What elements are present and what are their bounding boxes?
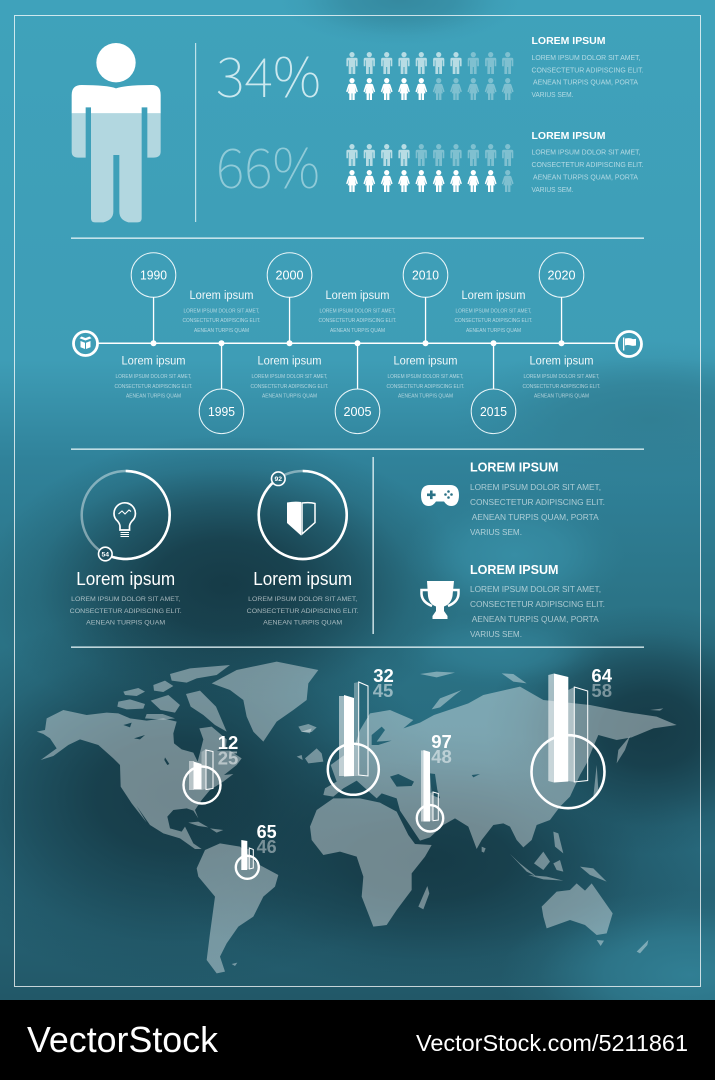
bar marker: East Asia 64 / 58: 58	[591, 680, 612, 701]
ring caption 2: AENEAN TURPIS QUAM	[263, 619, 343, 626]
ring caption 1: AENEAN TURPIS QUAM	[86, 619, 166, 626]
ring caption 2	[247, 569, 359, 626]
text block: second stat description: LOREM IPSUM	[532, 130, 606, 142]
text block: first stat description: LOREM IPSUM DOLOR SIT AMET,	[532, 53, 640, 62]
world map	[37, 662, 677, 973]
watermark url: VectorStock.com/5211861	[416, 1030, 688, 1056]
text block: gamepad note: VARIUS SEM.	[470, 527, 522, 537]
milestone 2015	[471, 340, 516, 434]
timeline text 5: LOREM IPSUM DOLOR SIT AMET,	[388, 374, 464, 380]
timeline text 3: AENEAN TURPIS QUAM	[262, 394, 317, 400]
timeline text 1: AENEAN TURPIS QUAM	[126, 394, 181, 400]
timeline text 2: Lorem ipsum	[190, 290, 254, 302]
milestone 1990: 1990	[140, 268, 167, 282]
pictogram row: men 4 of 10	[346, 144, 513, 166]
icon: trophy	[422, 581, 458, 619]
text block: trophy note: VARIUS SEM.	[470, 629, 522, 639]
footer bar	[0, 1000, 715, 1080]
watermark logo: VectorStock	[27, 1019, 219, 1060]
stat: 66%: 66%	[216, 124, 320, 204]
text block: gamepad note: AENEAN TURPIS QUAM, PORTA	[472, 512, 599, 522]
ring caption 2: Lorem ipsum	[253, 569, 352, 589]
ring chart: 54 with bulb	[82, 471, 170, 561]
bar marker: Middle East 97 / 48: 97	[431, 731, 452, 752]
text block: trophy note: LOREM IPSUM	[470, 563, 558, 577]
text block: gamepad note	[470, 461, 605, 537]
timeline text 2	[182, 290, 260, 334]
ring caption 2: CONSECTETUR ADIPISCING ELIT.	[247, 608, 359, 615]
timeline text 4: CONSECTETUR ADIPISCING ELIT.	[318, 318, 396, 324]
timeline text 4	[318, 290, 396, 334]
stat: 34%: 34%	[216, 33, 321, 113]
ring caption 2: LOREM IPSUM DOLOR SIT AMET,	[248, 596, 357, 603]
pictogram row: women 9 of 10	[346, 170, 514, 192]
bar marker: North America 12 / 25: 25	[218, 748, 238, 768]
text block: trophy note: AENEAN TURPIS QUAM, PORTA	[472, 614, 599, 624]
text block: second stat description: CONSECTETUR ADIPISCING ELIT.	[532, 160, 644, 169]
milestone 2010	[403, 253, 448, 346]
timeline text 1: CONSECTETUR ADIPISCING ELIT.	[114, 384, 192, 390]
timeline text 6: CONSECTETUR ADIPISCING ELIT.	[454, 318, 532, 324]
timeline text 4: Lorem ipsum	[326, 290, 390, 302]
timeline text 6	[454, 290, 532, 334]
bar marker: South America 65 / 46	[236, 822, 277, 879]
icon: open box start marker	[74, 332, 98, 356]
bar marker: South America 65 / 46: 46	[257, 837, 277, 857]
milestone 2020	[539, 253, 584, 346]
timeline text 2: LOREM IPSUM DOLOR SIT AMET,	[184, 308, 260, 314]
text block: second stat description: AENEAN TURPIS QUAM, PORTA	[533, 172, 638, 181]
panel: progress rings	[70, 471, 359, 626]
bar marker: North America 12 / 25	[184, 732, 238, 804]
text block: first stat description: VARIUS SEM.	[532, 90, 574, 99]
text block: gamepad note: LOREM IPSUM	[470, 461, 558, 475]
bar marker: Europe 32 / 45: 45	[373, 680, 393, 701]
timeline text 7	[522, 356, 600, 400]
map: eurasia, africa and oceania	[297, 672, 677, 953]
panel: game and trophy notes	[421, 461, 605, 639]
panel: gender statistics	[72, 33, 644, 222]
bar marker: North America 12 / 25: 12	[218, 732, 238, 753]
pictogram row: women 5 of 10	[346, 78, 514, 100]
icon: light bulb	[114, 503, 135, 536]
bar marker: Europe 32 / 45: 32	[373, 665, 394, 686]
bar marker: East Asia 64 / 58	[532, 665, 613, 808]
timeline text 7: CONSECTETUR ADIPISCING ELIT.	[522, 384, 600, 390]
text block: second stat description: LOREM IPSUM DOLOR SIT AMET,	[532, 148, 640, 157]
milestone 1995: 1995	[208, 405, 235, 419]
text block: first stat description: CONSECTETUR ADIPISCING ELIT.	[532, 65, 644, 74]
timeline text 2: CONSECTETUR ADIPISCING ELIT.	[182, 318, 260, 324]
timeline text 1: Lorem ipsum	[122, 356, 186, 368]
icon: shield	[287, 502, 315, 536]
milestone 2000	[267, 253, 312, 346]
text block: gamepad note: LOREM IPSUM DOLOR SIT AMET,	[470, 482, 601, 492]
text block: trophy note: CONSECTETUR ADIPISCING ELIT.	[470, 599, 605, 609]
timeline text 2: AENEAN TURPIS QUAM	[194, 328, 249, 334]
timeline text 6: Lorem ipsum	[462, 290, 526, 302]
map: americas and greenland	[37, 662, 318, 973]
timeline text 5: AENEAN TURPIS QUAM	[398, 394, 453, 400]
milestone 1995	[199, 340, 244, 434]
bar marker: Middle East 97 / 48	[417, 731, 452, 832]
timeline text 6: LOREM IPSUM DOLOR SIT AMET,	[456, 308, 532, 314]
timeline text 3: LOREM IPSUM DOLOR SIT AMET,	[252, 374, 328, 380]
ring caption 1: Lorem ipsum	[76, 569, 175, 589]
timeline text 6: AENEAN TURPIS QUAM	[466, 328, 521, 334]
timeline text 5: Lorem ipsum	[394, 356, 458, 368]
bar marker: South America 65 / 46: 65	[257, 822, 277, 842]
timeline text 7: LOREM IPSUM DOLOR SIT AMET,	[524, 374, 600, 380]
timeline text 1	[114, 356, 192, 400]
milestone 2010: 2010	[412, 268, 439, 282]
icon: gamepad	[421, 485, 459, 506]
timeline text 7: AENEAN TURPIS QUAM	[534, 394, 589, 400]
bar marker: Middle East 97 / 48: 48	[431, 746, 452, 767]
divider: section vertical rule	[372, 457, 374, 634]
divider: vertical rule	[195, 43, 196, 222]
timeline text 3: CONSECTETUR ADIPISCING ELIT.	[250, 384, 328, 390]
timeline text 4: AENEAN TURPIS QUAM	[330, 328, 385, 334]
ring caption 1: CONSECTETUR ADIPISCING ELIT.	[70, 608, 182, 615]
text block: trophy note	[470, 563, 605, 639]
milestone 1990	[131, 253, 176, 346]
milestone 2000: 2000	[276, 268, 304, 282]
milestone 2005: 2005	[344, 405, 372, 419]
text block: trophy note: LOREM IPSUM DOLOR SIT AMET,	[470, 584, 601, 594]
ring chart: 54 with bulb: 54	[102, 552, 109, 558]
timeline text 5: CONSECTETUR ADIPISCING ELIT.	[386, 384, 464, 390]
text block: first stat description	[532, 35, 644, 99]
timeline text 1: LOREM IPSUM DOLOR SIT AMET,	[116, 374, 192, 380]
ring chart: 92 with shield	[259, 471, 347, 559]
icon: large person figure	[72, 43, 161, 222]
bar marker: Europe 32 / 45	[328, 665, 394, 795]
ring chart: 92 with shield: 92	[275, 476, 282, 483]
milestone 2020: 2020	[548, 268, 576, 282]
timeline text 4: LOREM IPSUM DOLOR SIT AMET,	[320, 308, 396, 314]
text block: first stat description: LOREM IPSUM	[532, 35, 606, 47]
pictogram row: men 7 of 10	[346, 52, 513, 74]
timeline text 7: Lorem ipsum	[530, 356, 594, 368]
text block: second stat description: VARIUS SEM.	[532, 185, 574, 194]
ring caption 1: LOREM IPSUM DOLOR SIT AMET,	[71, 596, 180, 603]
text block: first stat description: AENEAN TURPIS QUAM, PORTA	[533, 78, 638, 87]
timeline text 3	[250, 356, 328, 400]
bar marker: East Asia 64 / 58: 64	[591, 665, 613, 686]
panel: timeline	[74, 253, 642, 434]
timeline text 5	[386, 356, 464, 400]
ring caption 1	[70, 569, 182, 626]
milestone 2015: 2015	[480, 405, 507, 419]
icon: flag end marker	[616, 332, 642, 356]
text block: gamepad note: CONSECTETUR ADIPISCING ELIT.	[470, 497, 605, 507]
timeline text 3: Lorem ipsum	[258, 356, 322, 368]
timeline axis	[98, 342, 616, 344]
text block: second stat description	[532, 130, 644, 194]
milestone 2005	[335, 340, 380, 434]
